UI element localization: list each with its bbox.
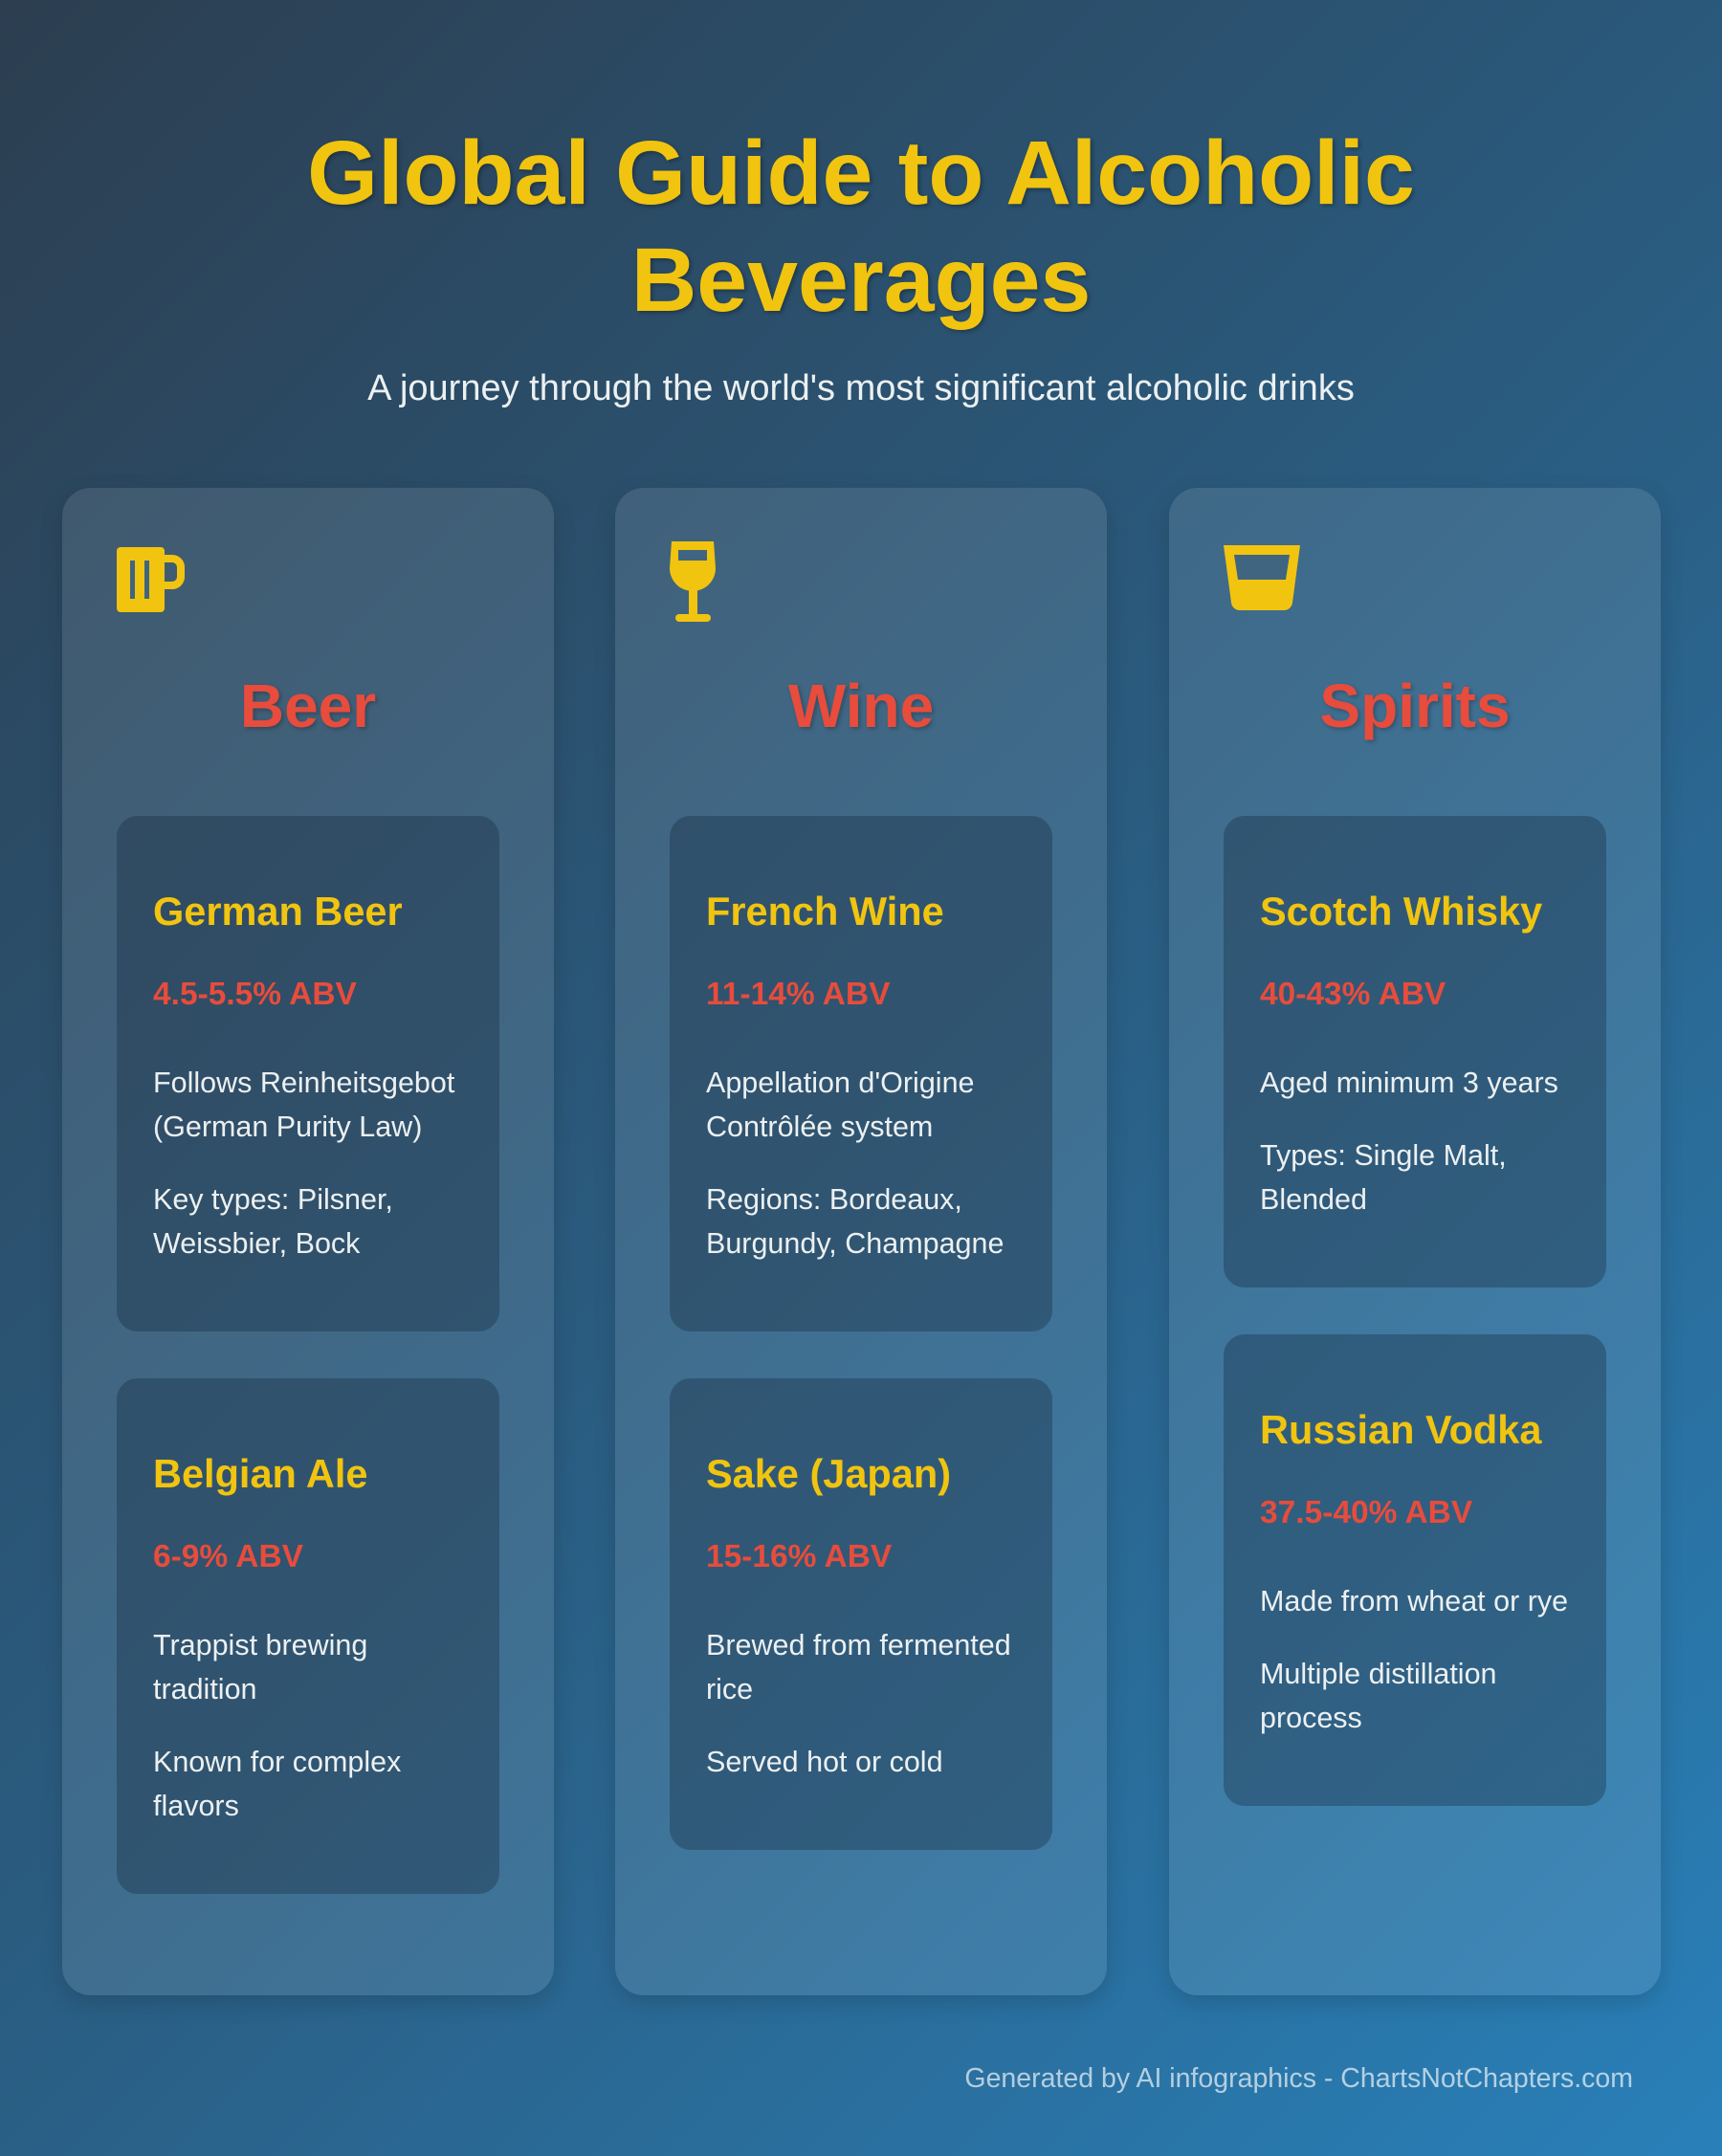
card: french wine: Appellation d'Origine Contrôlée system (706, 1067, 975, 1143)
footer: Generated by AI infographics - ChartsNotChapters.com (964, 2063, 1633, 2094)
heading: beer: Beer (240, 671, 376, 740)
card: belgian ale: Trappist brewing tradition (153, 1629, 367, 1705)
icon: whisky tumbler (1224, 545, 1300, 610)
card: sake: Served hot or cold (706, 1746, 943, 1778)
heading: wine: Wine (788, 671, 934, 740)
card: german beer: Key types: Pilsner, Weissbier, Bock (153, 1183, 393, 1260)
card: belgian ale: 6-9% ABV (153, 1539, 303, 1574)
card: russian vodka: Made from wheat or rye (1260, 1585, 1568, 1617)
card: russian vodka: Russian Vodka (1260, 1407, 1541, 1452)
card: scotch whisky (1224, 816, 1606, 1287)
card: belgian ale: Belgian Ale (153, 1451, 367, 1496)
card: belgian ale: Known for complex flavors (153, 1746, 401, 1822)
card: scotch whisky: Scotch Whisky (1260, 889, 1542, 934)
card: german beer: 4.5-5.5% ABV (153, 977, 357, 1012)
icon: beer mug (117, 547, 185, 612)
icon: wine glass (670, 541, 716, 622)
heading: spirits: Spirits (1319, 671, 1511, 740)
card: belgian ale (117, 1378, 499, 1894)
card: sake: 15-16% ABV (706, 1539, 892, 1574)
card: scotch whisky: Types: Single Malt, Blended (1260, 1139, 1507, 1216)
card: french wine (670, 816, 1052, 1331)
subtitle: A journey through the world's most significant alcoholic drinks (367, 368, 1355, 408)
card: french wine: 11-14% ABV (706, 977, 890, 1012)
panel: beer (62, 488, 554, 1995)
card: german beer (117, 816, 499, 1331)
card: sake: Brewed from fermented rice (706, 1629, 1011, 1705)
card: russian vodka: 37.5-40% ABV (1260, 1495, 1472, 1530)
card: russian vodka (1224, 1334, 1606, 1806)
card: scotch whisky: Aged minimum 3 years (1260, 1067, 1558, 1099)
card: german beer: Follows Reinheitsgebot (German Purity Law) (153, 1067, 454, 1143)
title (307, 122, 1415, 333)
title: Beverages (631, 230, 1091, 331)
card: german beer: German Beer (153, 889, 403, 934)
panel: wine (615, 488, 1107, 1995)
card: scotch whisky: 40-43% ABV (1260, 977, 1446, 1012)
card: sake (670, 1378, 1052, 1850)
card: sake: Sake (Japan) (706, 1451, 951, 1496)
card: russian vodka: Multiple distillation process (1260, 1658, 1496, 1734)
title: Global Guide to Alcoholic (307, 122, 1415, 224)
panel: spirits (1169, 488, 1661, 1995)
card: french wine: French Wine (706, 889, 944, 934)
card: french wine: Regions: Bordeaux, Burgundy, Champagne (706, 1183, 1004, 1260)
